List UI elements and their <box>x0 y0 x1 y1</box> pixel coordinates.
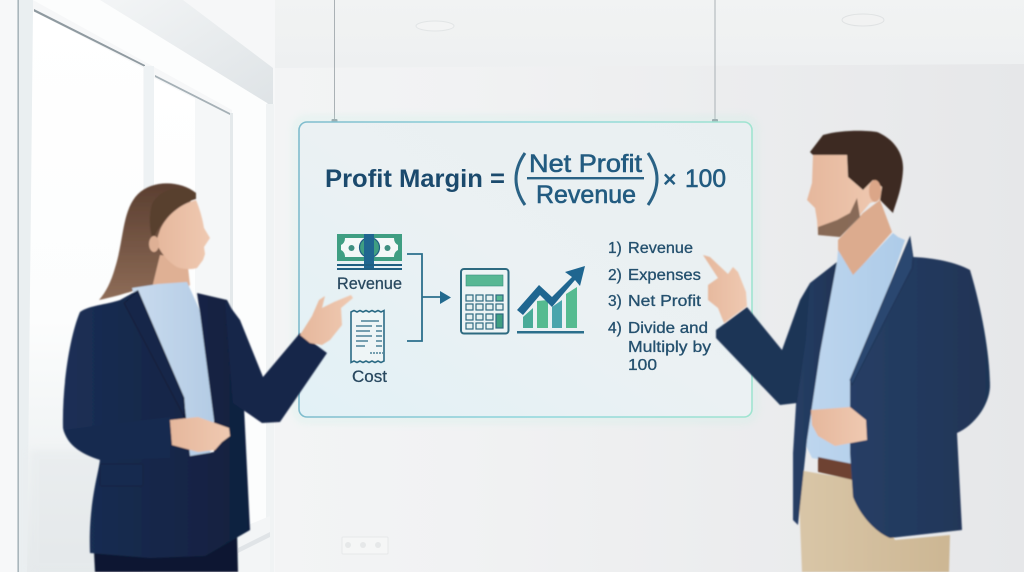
hair back <box>99 183 196 300</box>
text block: steps list: 4) <box>608 320 622 337</box>
text block: steps list <box>608 240 711 374</box>
hair <box>810 131 903 213</box>
beard <box>818 198 860 237</box>
jacket front left <box>793 262 837 525</box>
formula heading: 100 <box>685 165 726 193</box>
belt <box>818 457 853 480</box>
text block: steps list: 3) <box>608 293 622 310</box>
sleeve <box>64 417 170 460</box>
icon: banknote <box>337 234 402 270</box>
formula heading: Profit Margin = <box>325 165 505 193</box>
lower hand <box>811 407 867 446</box>
panel: glass board <box>296 119 755 420</box>
text block: steps list: Divide and <box>628 320 708 337</box>
lapel <box>124 291 185 418</box>
formula heading <box>325 150 726 209</box>
formula heading: Net Profit <box>529 150 642 178</box>
window wall with frames and panes <box>0 0 275 572</box>
label: Cost: Cost <box>352 368 387 386</box>
icon: receipt <box>351 310 384 362</box>
hanging cables <box>332 0 718 124</box>
lower hand <box>170 417 230 452</box>
figure: businessman <box>703 131 990 572</box>
text block: steps list: 2) <box>608 267 622 284</box>
ear <box>869 180 881 202</box>
wall socket <box>342 537 388 554</box>
text block: steps list: Expenses <box>628 267 701 284</box>
icon: calculator <box>461 269 508 334</box>
left arm <box>716 283 810 405</box>
formula heading: × <box>663 166 676 192</box>
formula heading: Revenue <box>536 181 636 209</box>
text block: steps list: Multiply by <box>628 339 711 356</box>
neck <box>838 200 892 276</box>
icon: growth chart <box>517 266 585 334</box>
label: Revenue: Revenue <box>337 275 402 293</box>
right arm <box>225 300 327 423</box>
text block: steps list: 100 <box>628 357 657 374</box>
lapel <box>850 237 913 385</box>
pointing hand <box>300 295 353 345</box>
trousers <box>798 470 950 572</box>
shirt <box>803 233 905 465</box>
face <box>807 155 882 237</box>
shirt <box>132 282 214 456</box>
ear <box>149 236 159 252</box>
jacket body <box>850 237 990 538</box>
face <box>156 200 210 269</box>
figure: businesswoman <box>63 183 353 572</box>
pointing hand <box>703 255 747 323</box>
neck <box>152 255 190 303</box>
text block: steps list: Revenue <box>628 240 693 257</box>
trousers <box>94 530 238 572</box>
text block: steps list: 1) <box>608 240 622 257</box>
hair front <box>150 188 196 240</box>
jacket <box>63 290 250 558</box>
text block: steps list: Net Profit <box>628 293 702 310</box>
arrow: bracket to calculator <box>407 254 451 341</box>
pocket <box>100 464 143 486</box>
